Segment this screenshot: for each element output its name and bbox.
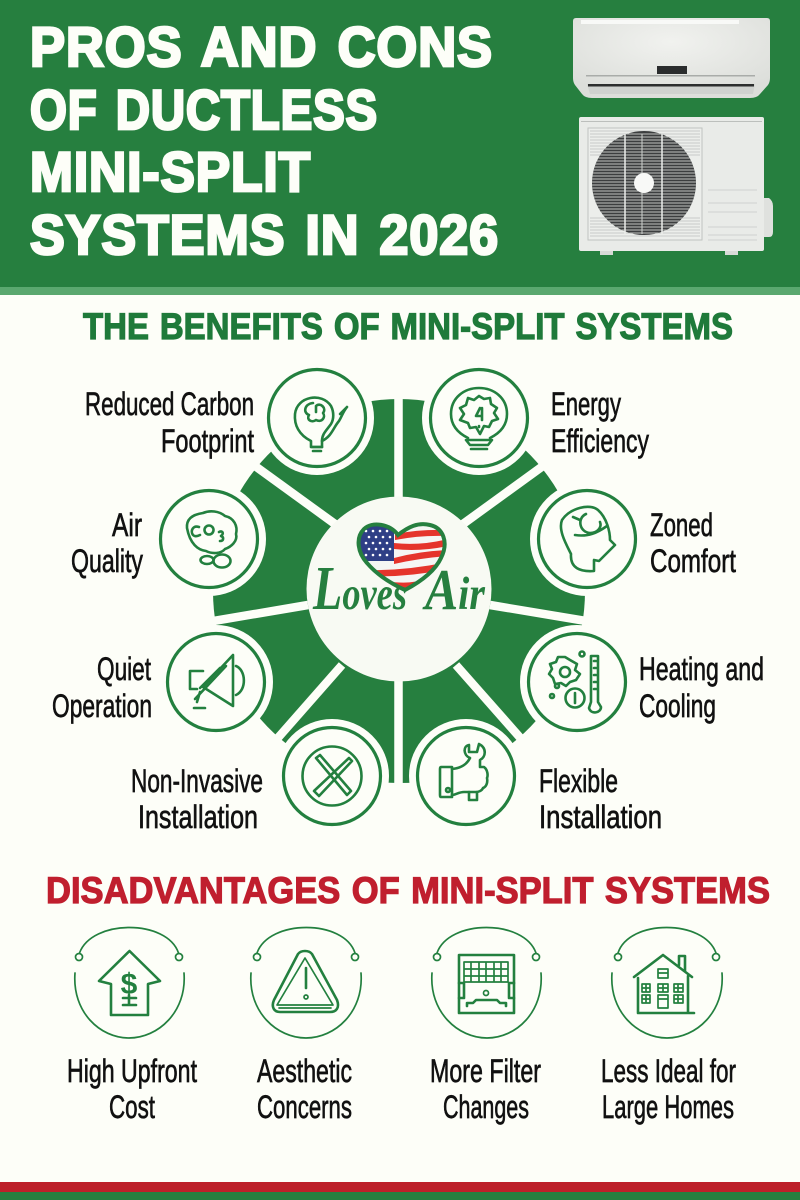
label: quiet operation: Operation <box>52 688 152 724</box>
outdoor AC unit <box>579 117 773 255</box>
icon: energy efficiency <box>430 370 528 466</box>
label: more filter changes: Changes <box>443 1089 529 1125</box>
label: high upfront cost <box>67 1053 197 1125</box>
logo: Loves Air: Loves <box>312 555 407 623</box>
label: zoned comfort: Comfort <box>650 543 736 579</box>
label: high upfront cost: High Upfront <box>67 1053 197 1089</box>
icon: heating and cooling <box>528 634 626 730</box>
label: air quality <box>71 507 143 579</box>
title <box>30 15 499 266</box>
label: non-invasive installation: Non-Invasive <box>131 763 263 799</box>
label: energy efficiency: Energy <box>551 386 621 422</box>
icon: flexible installation <box>418 728 514 824</box>
label: less ideal for large homes <box>601 1053 736 1125</box>
header band <box>0 0 800 295</box>
icon: zoned comfort <box>538 490 636 588</box>
label: air quality: Quality <box>71 543 143 579</box>
label: flexible installation <box>539 763 662 835</box>
label: more filter changes: More Filter <box>430 1053 541 1089</box>
label: reduced carbon footprint: Footprint <box>161 423 254 459</box>
label: air quality: Air <box>112 507 142 543</box>
icon: less ideal for large homes <box>612 928 722 1038</box>
label: aesthetic concerns: Concerns <box>257 1089 352 1125</box>
icon: quiet operation <box>168 634 264 730</box>
logo: Loves Air: Air <box>422 557 486 622</box>
footer bars <box>0 1182 800 1200</box>
heading: benefits: THE BENEFITS OF MINI-SPLIT SYSTEMS <box>83 306 733 347</box>
title: SYSTEMS IN 2026 <box>30 203 499 266</box>
label: flexible installation: Installation <box>539 799 662 835</box>
label: heating and cooling <box>639 651 764 724</box>
label: flexible installation: Flexible <box>539 763 618 799</box>
label: aesthetic concerns <box>257 1053 352 1125</box>
icon: non-invasive installation <box>284 728 380 824</box>
label: reduced carbon footprint: Reduced Carbon <box>85 386 254 422</box>
label: energy efficiency: Efficiency <box>551 423 649 459</box>
label: high upfront cost: Cost <box>109 1089 155 1125</box>
icon: aesthetic concerns <box>251 928 361 1038</box>
icon: air quality <box>160 490 258 588</box>
label: zoned comfort: Zoned <box>650 507 713 543</box>
flag heart <box>356 522 447 592</box>
label: more filter changes <box>430 1053 541 1125</box>
label: aesthetic concerns: Aesthetic <box>257 1053 352 1089</box>
heading: disadvantages: DISADVANTAGES OF MINI-SPLIT SYSTEMS <box>46 870 770 911</box>
indoor AC unit <box>573 18 770 98</box>
benefits wheel <box>152 361 644 833</box>
label: heating and cooling: Cooling <box>639 688 716 724</box>
title: PROS AND CONS <box>30 15 493 78</box>
label: non-invasive installation <box>131 763 263 835</box>
label: non-invasive installation: Installation <box>138 799 258 835</box>
icon: reduced carbon footprint <box>268 370 366 466</box>
icon: high upfront cost: $ <box>121 968 138 1001</box>
icon: more filter changes <box>432 928 541 1038</box>
label: quiet operation <box>52 651 152 724</box>
label: zoned comfort <box>650 507 736 579</box>
label: less ideal for large homes: Large Homes <box>602 1089 734 1125</box>
label: less ideal for large homes: Less Ideal for <box>601 1053 736 1089</box>
label: quiet operation: Quiet <box>97 651 151 687</box>
label: energy efficiency <box>551 386 649 459</box>
title: OF DUCTLESS <box>30 78 378 141</box>
logo: Loves Air <box>312 522 486 610</box>
title: MINI-SPLIT <box>30 140 311 203</box>
icon: high upfront cost <box>75 928 184 1038</box>
label: reduced carbon footprint <box>85 386 254 459</box>
